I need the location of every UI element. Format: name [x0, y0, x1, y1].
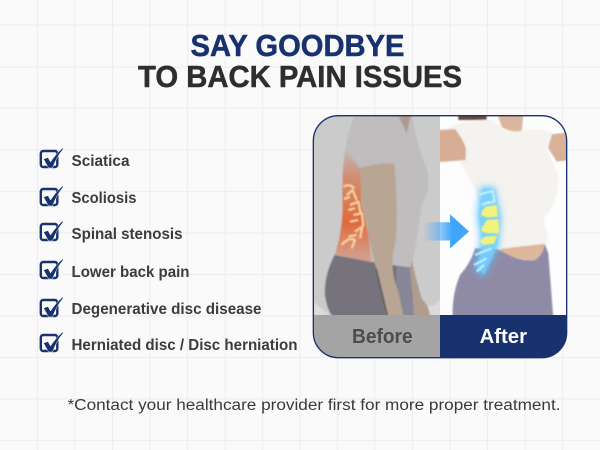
after label: After — [480, 326, 527, 348]
item: Herniated disc / Disc herniation — [41, 332, 298, 354]
panel: before and after comparison — [313, 112, 570, 358]
title: SAY GOODBYE — [190, 28, 404, 63]
item: Scoliosis: Scoliosis — [72, 190, 136, 207]
item: Lower back pain — [41, 259, 189, 281]
item: Sciatica: Sciatica — [72, 153, 130, 170]
item: Degenerative disc disease — [41, 297, 262, 318]
item: Degenerative disc disease: Degenerative disc disease — [72, 301, 262, 318]
item: Lower back pain: Lower back pain — [72, 264, 190, 281]
item: Herniated disc / Disc herniation: Herniated disc / Disc herniation — [72, 337, 298, 354]
before photo — [313, 112, 440, 318]
after label band — [440, 315, 567, 358]
back pain spine — [342, 185, 363, 248]
checklist — [41, 148, 298, 354]
orange pain area on back — [335, 148, 372, 262]
item: Sciatica — [41, 148, 130, 170]
title: TO BACK PAIN ISSUES — [138, 59, 462, 94]
title — [138, 28, 462, 94]
item: Scoliosis — [41, 186, 136, 207]
before label band — [313, 315, 440, 358]
item: Spinal stenosis — [41, 221, 182, 243]
footnote: *Contact your healthcare provider first for more proper treatment. — [68, 397, 560, 414]
after photo — [437, 112, 570, 318]
item: Spinal stenosis: Spinal stenosis — [72, 226, 182, 243]
healthy spine — [473, 187, 502, 278]
before label: Before — [352, 326, 413, 348]
arrow: before to after — [423, 214, 469, 248]
